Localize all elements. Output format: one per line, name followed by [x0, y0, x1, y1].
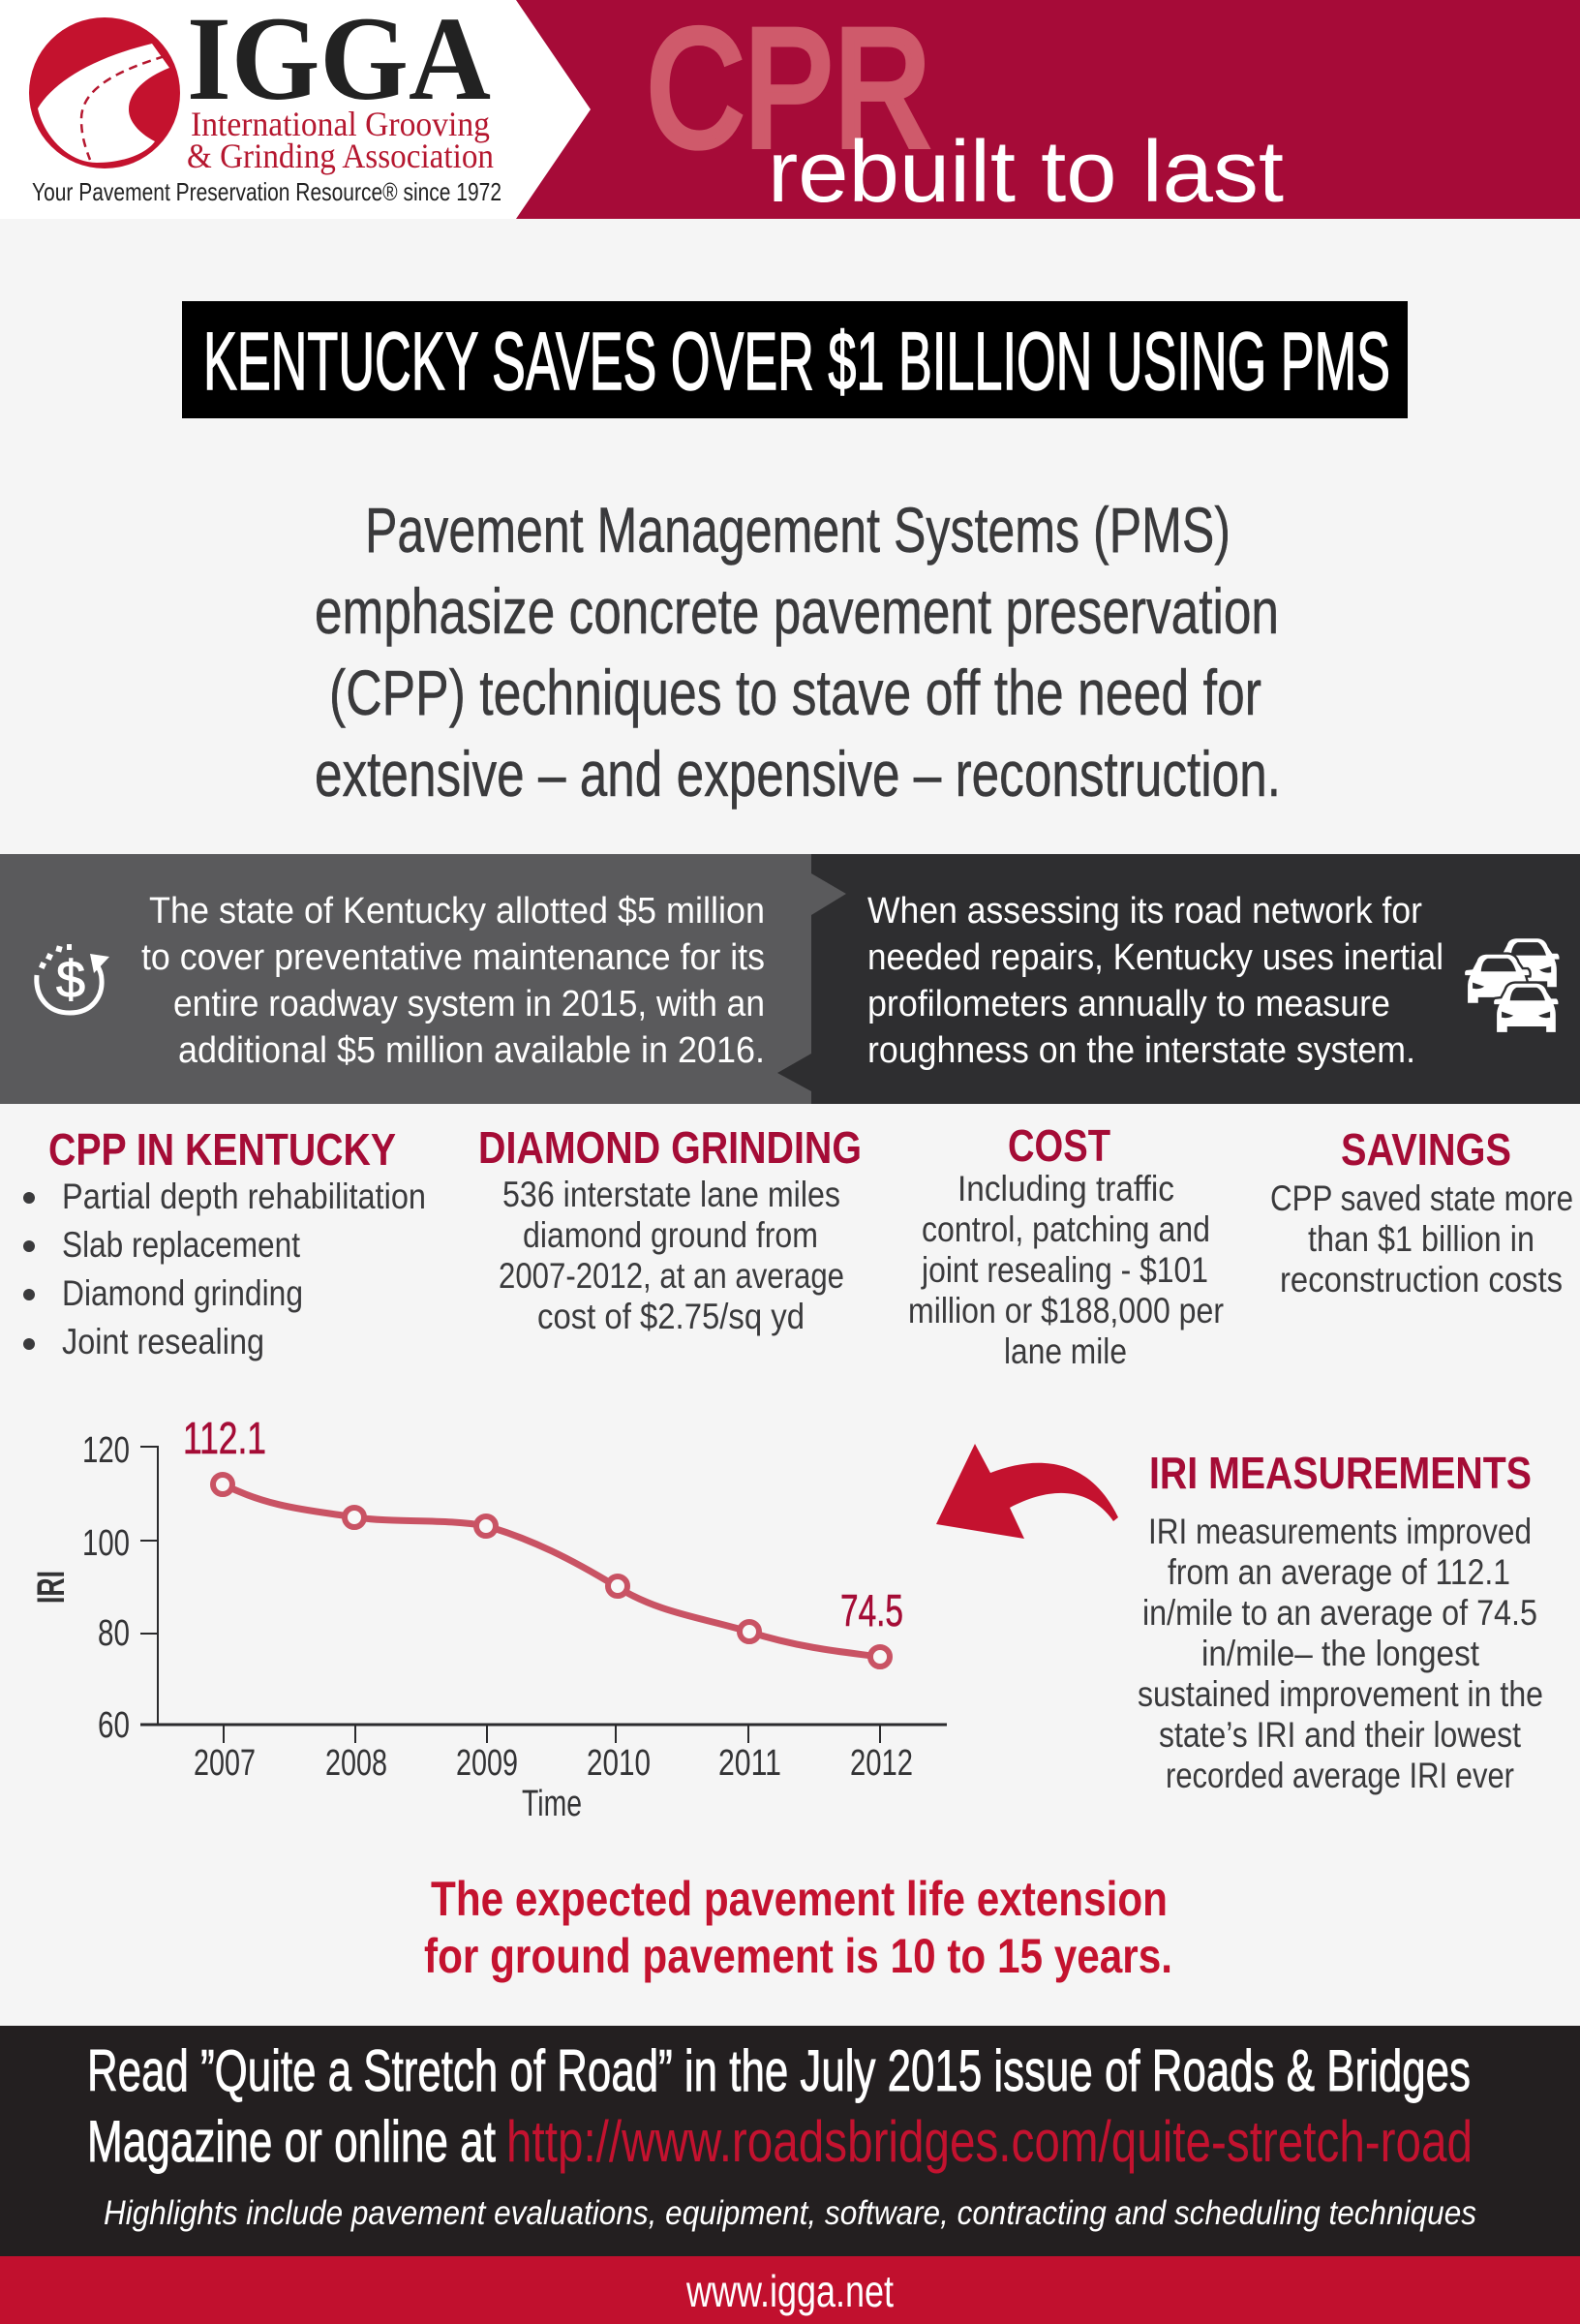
body text: Including traffic: [957, 1169, 1174, 1208]
callout: pavement life extension: for ground pavement is 10 to 15 years.: [424, 1929, 1172, 1983]
read more line 2: Magazine or online at: [87, 2109, 496, 2174]
bullet list: Diamond grinding: [62, 1273, 303, 1313]
text: funding: The state of Kentucky allotted $5 million: [149, 891, 765, 932]
intro text block: emphasize concrete pavement preservation: [315, 575, 1279, 647]
body text: [1270, 1178, 1573, 1300]
header banner: [0, 0, 1580, 221]
panel: diamond grinding: [478, 1122, 862, 1336]
y axis tick labels: 60: [98, 1705, 130, 1746]
text: funding: [141, 891, 765, 1071]
icon: dollar with circular arrow: $: [56, 951, 85, 1009]
line chart: IRI by year: [30, 1413, 947, 1824]
footer website bar: [0, 2256, 1580, 2324]
y axis tick labels: 100: [82, 1523, 130, 1564]
body text: cost of $2.75/sq yd: [537, 1297, 805, 1336]
bullet list: Partial depth rehabilitation: [62, 1177, 426, 1216]
body text: lane mile: [1004, 1331, 1127, 1371]
text: profilometers: needed repairs, Kentucky uses inertial: [867, 937, 1443, 978]
x axis tick labels: [194, 1743, 913, 1784]
body text: [908, 1169, 1224, 1371]
heading: SAVINGS: [1341, 1124, 1511, 1175]
y axis title: IRI: [30, 1571, 73, 1604]
data line: [224, 1484, 880, 1657]
body text: [1138, 1512, 1543, 1795]
body text: than $1 billion in: [1308, 1219, 1534, 1259]
body text: million or $188,000 per: [908, 1291, 1224, 1330]
data points: [213, 1475, 890, 1667]
x axis tick labels: 2010: [587, 1743, 651, 1784]
y axis tick labels: 120: [82, 1430, 130, 1471]
logo subtitle line 2: & Grinding Association: [187, 137, 494, 175]
text: funding: additional $5 million available in 2016.: [178, 1030, 765, 1071]
data label: 2012: 74.5: [840, 1585, 903, 1636]
intro text block: [315, 494, 1281, 810]
footer website bar: www.igga.net: [685, 2266, 894, 2316]
title bar: [182, 301, 1408, 418]
panel: CPP in Kentucky: [23, 1124, 426, 1361]
text: profilometers: profilometers annually to measure: [867, 984, 1390, 1024]
heading: COST: [1008, 1120, 1110, 1171]
icon: dollar with circular arrow: [37, 944, 109, 1013]
text: profilometers: When assessing its road network for: [867, 891, 1422, 932]
body text: state’s IRI and their lowest: [1159, 1715, 1522, 1755]
text: funding: to cover preventative maintenance for its: [141, 937, 765, 978]
intro text block: extensive – and expensive – reconstruction.: [315, 738, 1281, 810]
bullet list: [23, 1177, 426, 1361]
chart axes: [140, 1447, 947, 1743]
callout: pavement life extension: The expected pavement life extension: [431, 1872, 1168, 1926]
heading: CPP IN KENTUCKY: [48, 1124, 396, 1175]
body text: in/mile– the longest: [1201, 1634, 1480, 1673]
heading: DIAMOND GRINDING: [478, 1122, 862, 1173]
bullet list: Slab replacement: [62, 1225, 301, 1265]
arrow pointing to chart: [936, 1444, 1118, 1539]
logo subtitle line 1: International Grooving: [191, 105, 490, 143]
body text: diamond ground from: [523, 1215, 818, 1255]
callout: pavement life extension: [424, 1872, 1172, 1983]
data label: 2007: 112.1: [183, 1413, 266, 1463]
body text: 536 interstate lane miles: [502, 1175, 840, 1214]
text: profilometers: roughness on the interstate system.: [867, 1030, 1415, 1071]
logo tagline: Your Pavement Preservation Resource® since 1972: [32, 177, 501, 206]
x axis tick labels: 2009: [456, 1743, 518, 1784]
panel: savings: [1270, 1124, 1573, 1300]
body text: from an average of 112.1: [1168, 1552, 1510, 1592]
logo: IGGA: [29, 0, 501, 206]
body text: recorded average IRI ever: [1166, 1756, 1514, 1795]
body text: [499, 1175, 844, 1336]
y axis tick labels: 80: [98, 1613, 130, 1654]
header tagline: rebuilt to last: [768, 124, 1284, 221]
intro text block: Pavement Management Systems (PMS): [365, 494, 1231, 566]
header word CPR: CPR: [647, 0, 931, 181]
icon: cars in traffic: [1464, 937, 1561, 1033]
panel: funding and profilometers band: [0, 854, 1580, 1104]
icon: road in red circle: [29, 17, 180, 168]
x axis title: Time: [522, 1784, 582, 1824]
intro text block: (CPP) techniques to stave off the need for: [329, 657, 1261, 728]
body text: 2007-2012, at an average: [499, 1256, 844, 1296]
panel: read more footer: [0, 2026, 1580, 2256]
y axis tick labels: [82, 1430, 130, 1746]
body text: joint resealing - $101: [921, 1250, 1208, 1290]
x axis tick labels: 2007: [194, 1743, 256, 1784]
panel: IRI measurements: [1138, 1448, 1543, 1795]
text: profilometers: [867, 891, 1443, 1071]
x axis tick labels: 2008: [325, 1743, 387, 1784]
x axis tick labels: 2011: [718, 1743, 781, 1784]
body text: control, patching and: [922, 1209, 1210, 1249]
panel: cost: [908, 1120, 1224, 1371]
bullet list: Joint resealing: [62, 1322, 264, 1361]
x axis tick labels: 2012: [850, 1743, 913, 1784]
text: funding: entire roadway system in 2015, with an: [173, 984, 765, 1024]
